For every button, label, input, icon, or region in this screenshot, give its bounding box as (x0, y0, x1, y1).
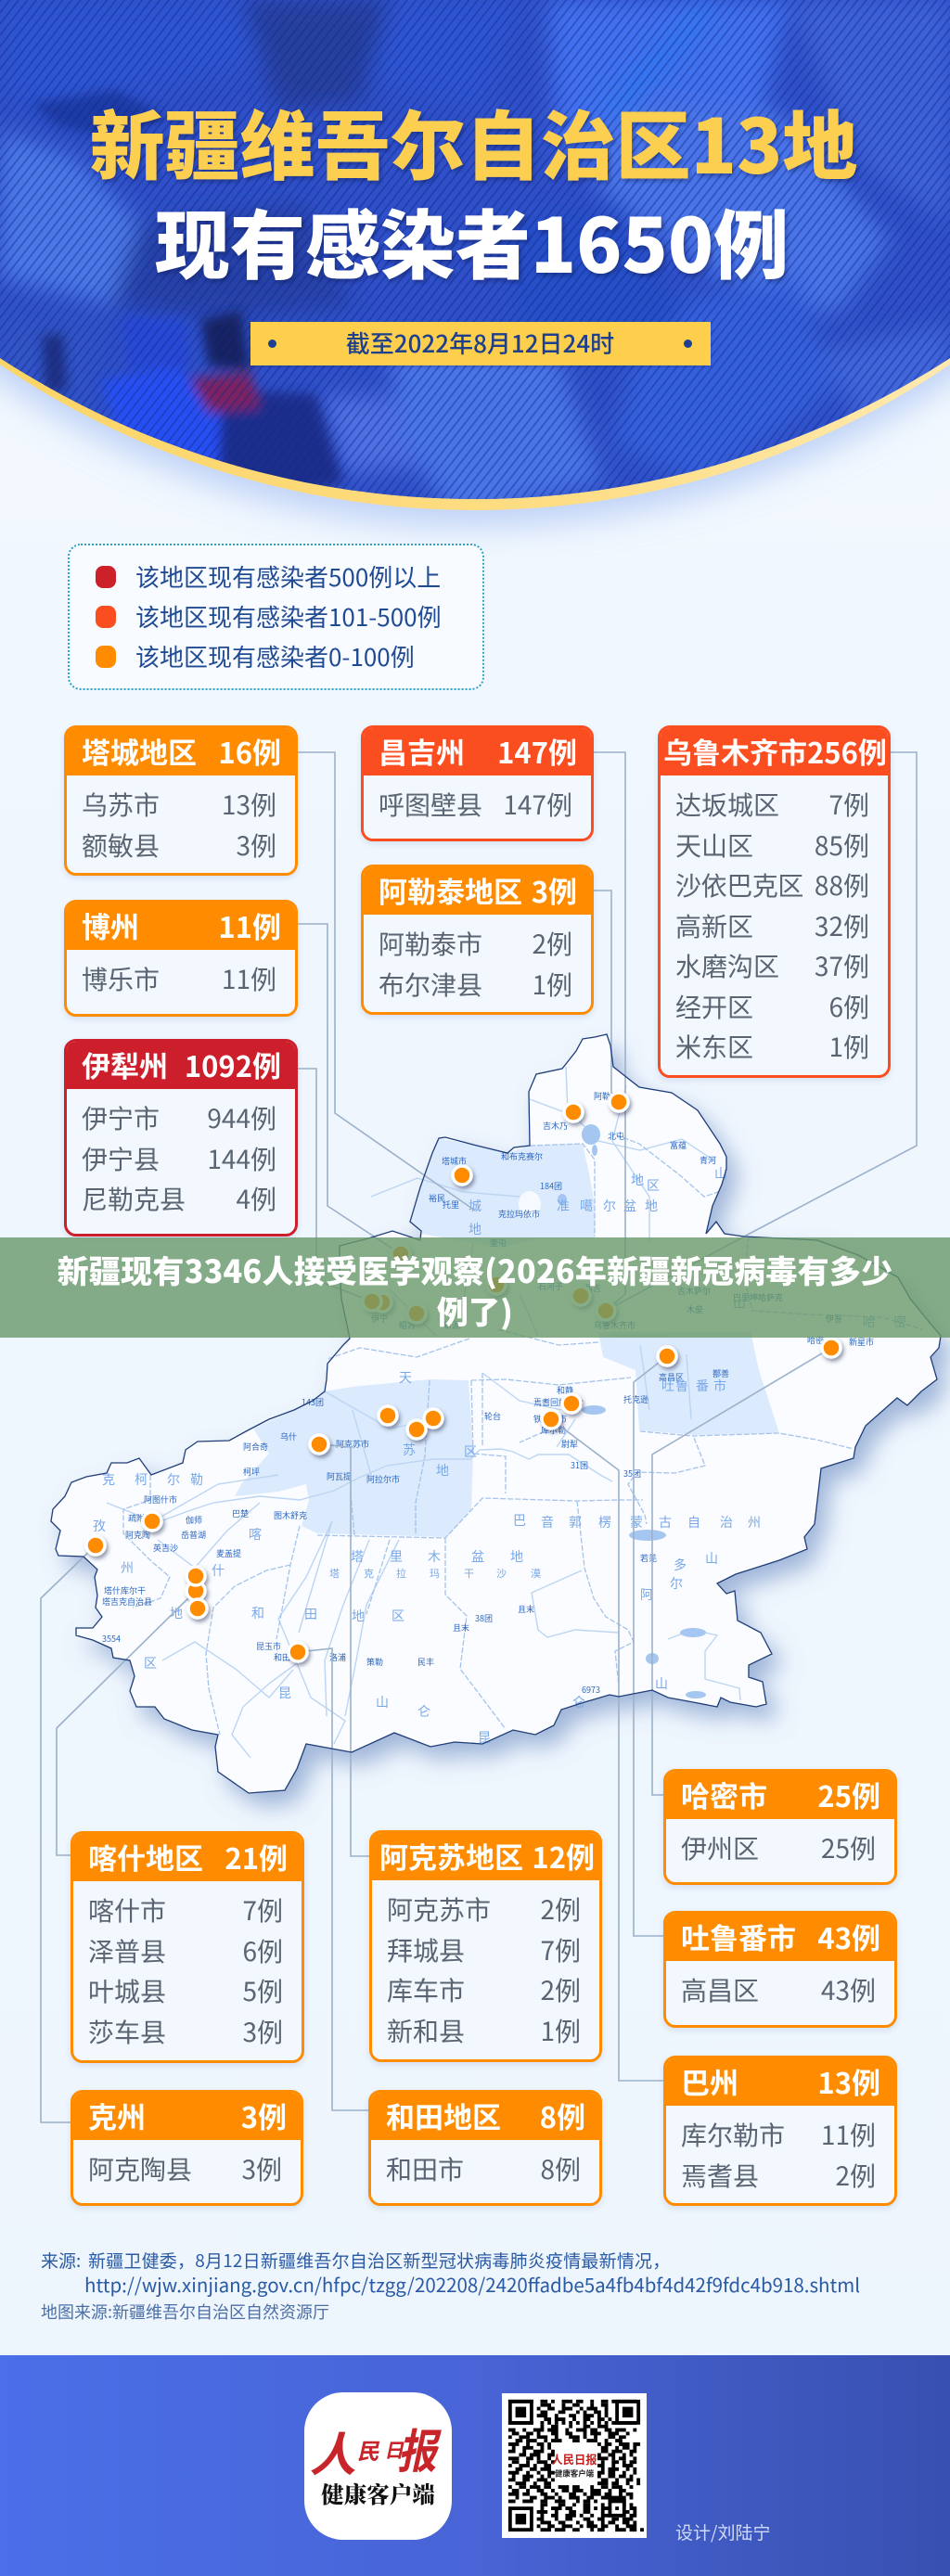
map region names: 地 (631, 1171, 644, 1189)
map region names: 郭 (569, 1513, 582, 1532)
map region names: 盆 (471, 1547, 484, 1566)
map labels: 143团 (302, 1396, 324, 1408)
lakes (519, 1124, 706, 1698)
card: Bortala: 11例 (218, 904, 281, 946)
map labels: 岳普湖 (181, 1529, 206, 1541)
map labels: 昭苏 (399, 1319, 416, 1331)
legend row: over 500: 该地区现有感染者500例以上 (135, 559, 441, 594)
source text (41, 2248, 860, 2324)
card: Ili: 伊宁县 (82, 1139, 160, 1176)
card: Kashgar: 7例 (242, 1891, 283, 1929)
card: Urumqi: 达坂城区 (675, 786, 779, 823)
card: Kashgar: 泽普县 (88, 1931, 166, 1968)
card: Aksu: 阿克苏市 (387, 1890, 491, 1928)
map labels: 克拉玛依市 (498, 1208, 540, 1220)
card: Urumqi: 7例 (828, 786, 869, 823)
map labels: 若羌 (640, 1552, 657, 1564)
map labels: 吉木萨尔 (677, 1285, 711, 1297)
map labels: 184团 (540, 1180, 562, 1192)
logo: People's Daily Health app: 人 (306, 2418, 369, 2485)
map labels: 伊吾 (826, 1313, 842, 1325)
card: Tacheng (64, 725, 298, 876)
card: Bayingolin: 焉耆县 (681, 2156, 759, 2193)
card: Turpan: 43例 (821, 1971, 876, 2008)
map labels: 且末 (518, 1603, 534, 1615)
card: Urumqi: 高新区 (675, 907, 753, 944)
map region names: 柯 (135, 1470, 148, 1489)
map labels: 哈密 (807, 1334, 824, 1346)
card: Hotan (368, 2090, 602, 2206)
map region names: 哈 (863, 1313, 876, 1331)
map region names: 山 (705, 1549, 718, 1568)
map labels: 木垒 (687, 1303, 703, 1315)
card: Changji: 昌吉州 (379, 730, 465, 772)
card: Hotan: 8例 (540, 2095, 585, 2136)
card: Altay: 3例 (532, 869, 577, 911)
map region names: 仑 (572, 1693, 585, 1711)
map region names: 什 (212, 1561, 225, 1580)
map labels: 31团 (571, 1459, 588, 1471)
map labels: 鄯善 (712, 1367, 729, 1379)
card: Kizilsu: 阿克陶县 (88, 2150, 192, 2187)
card: Hotan: 和田市 (386, 2150, 464, 2187)
map region names: 准 (557, 1197, 570, 1215)
map labels: 且末 (453, 1621, 469, 1634)
map labels: 尉犁 (561, 1438, 578, 1450)
logo: People's Daily Health app: 报 (394, 2415, 448, 2482)
map region names: 蒙 (630, 1513, 643, 1532)
map labels: 阿克苏市 (336, 1438, 369, 1450)
map labels: 阿勒泰 (594, 1090, 619, 1102)
map labels: 裕民 (429, 1192, 445, 1204)
card: Changji: 147例 (503, 786, 572, 823)
map labels: 阿瓦提 (327, 1470, 352, 1482)
card: Kizilsu: 3例 (241, 2095, 287, 2136)
card: Urumqi: 6例 (828, 987, 869, 1024)
map region names: 巴 (513, 1511, 526, 1530)
card: Urumqi: 经开区 (675, 987, 753, 1024)
map region names: 田 (304, 1605, 317, 1623)
card: Changji: 呼图壁县 (379, 786, 482, 823)
footer band (0, 2355, 950, 2576)
map region names: 勒 (190, 1470, 203, 1489)
card: Kashgar (71, 1831, 304, 2063)
map labels: 乌什 (280, 1430, 297, 1442)
map labels: 和布克赛尔 (501, 1150, 543, 1162)
map labels: 奎屯 (490, 1237, 507, 1249)
card: Aksu: 拜城县 (387, 1931, 465, 1968)
QR code: 健康客户端 (555, 2468, 595, 2480)
card: Turpan (663, 1911, 897, 2028)
map labels: 35团 (623, 1467, 641, 1480)
map region names: 州 (748, 1513, 761, 1532)
map labels: 伊宁 (371, 1313, 388, 1325)
card: Bayingolin: 13例 (817, 2060, 880, 2102)
card: Aksu: 2例 (540, 1971, 581, 2008)
map region names: 多 (674, 1556, 687, 1574)
card: Hami (663, 1769, 897, 1885)
card: Aksu: 1例 (540, 2011, 581, 2048)
map region names: 山 (714, 1164, 727, 1183)
header hero: blurred photo with diagonal stripes and yellow arc (0, 0, 950, 543)
map region names: 地 (170, 1604, 183, 1622)
map region names: 治 (720, 1513, 733, 1532)
map labels: 阿克陶 (125, 1529, 150, 1541)
card: Bortala: 博乐市 (82, 960, 160, 997)
card: Changji: 147例 (497, 730, 577, 772)
map region names: 区 (392, 1607, 404, 1625)
map region names: 古 (659, 1513, 672, 1532)
card: Bortala: 11例 (222, 960, 276, 997)
card: Turpan: 43例 (817, 1916, 880, 1957)
card: Tacheng: 13例 (222, 786, 276, 823)
highlighted prefecture: Aksu (235, 1379, 473, 1537)
date banner (250, 322, 711, 365)
map region names: 楞 (598, 1513, 611, 1532)
logo: People's Daily Health app: 民 (355, 2433, 385, 2466)
map labels: 托克逊 (623, 1393, 648, 1405)
map labels: 青河 (700, 1154, 716, 1166)
map region names: 地 (352, 1607, 365, 1625)
map region names: 噶 (580, 1197, 593, 1215)
card: Kashgar: 莎车县 (88, 2013, 166, 2050)
card: Urumqi: 水磨沟区 (675, 947, 779, 984)
designer credit: 设计/刘陆宁 (675, 2519, 770, 2544)
map outline (51, 1034, 941, 1793)
map region names: 地 (469, 1220, 481, 1238)
map labels: 北屯 (608, 1130, 624, 1142)
source text: http://wjw.xinjiang.gov.cn/hfpc/tzgg/202208/2420ffadbe5a4fb4bf4d42f9fdc4b918.shtml (84, 2270, 860, 2298)
card: Altay: 阿勒泰市 (379, 925, 482, 962)
card: Bayingolin: 2例 (835, 2156, 876, 2193)
map labels: 乌鲁木齐市 (594, 1319, 635, 1331)
map region names: 克 (102, 1470, 115, 1489)
map region names: 区 (464, 1442, 477, 1461)
map labels: 英吉沙 (153, 1542, 178, 1554)
card: Ili (64, 1039, 298, 1237)
card: Bortala (64, 900, 298, 1017)
pins: locations with cases (86, 1093, 841, 1661)
map labels: 巴楚 (232, 1507, 249, 1519)
map region names: 山 (376, 1693, 389, 1711)
map region names: 苏 (403, 1441, 416, 1459)
QR code (502, 2393, 647, 2538)
card: Kashgar: 3例 (242, 2013, 283, 2050)
map region names: 沙 (496, 1566, 507, 1581)
card: Tacheng: 额敏县 (82, 826, 160, 863)
map labels: 轮台 (484, 1410, 501, 1422)
map land shape (51, 1034, 941, 1793)
map region names: 尔 (603, 1197, 616, 1215)
map labels: 阿图什市 (144, 1493, 177, 1506)
map region names: 仑 (417, 1702, 430, 1721)
legend row: 101-500: 该地区现有感染者101-500例 (135, 599, 442, 634)
map labels: 伽师 (186, 1514, 202, 1526)
map region names: 天 (399, 1368, 412, 1387)
card: Hami: 25例 (817, 1774, 880, 1815)
map region names: 玛 (430, 1566, 440, 1581)
card: Kashgar: 喀什市 (88, 1891, 166, 1929)
map labels: 新源 (443, 1319, 460, 1331)
card: Ili: 尼勒克县 (82, 1180, 186, 1217)
card: Ili: 伊犁州 (82, 1044, 168, 1085)
title line 2: 现有感染者1650例 (155, 186, 789, 295)
card: Bortala: 博州 (82, 904, 139, 946)
map labels: 38团 (475, 1612, 493, 1624)
card: Bayingolin: 库尔勒市 (681, 2116, 785, 2153)
card: Bayingolin: 巴州 (681, 2060, 738, 2102)
card: Ili: 4例 (236, 1180, 276, 1217)
legend panel (68, 544, 484, 690)
map region names: 尔 (670, 1574, 683, 1593)
map region names: 城 (469, 1197, 481, 1215)
card: Aksu: 阿克苏地区 (379, 1835, 523, 1877)
card: Tacheng: 塔城地区 (82, 730, 197, 772)
card: Hami: 伊州区 (681, 1829, 759, 1866)
card: Hotan: 和田地区 (386, 2095, 501, 2136)
connector lines (41, 752, 917, 2122)
map labels: 新星市 (849, 1336, 874, 1348)
card: Aksu: 2例 (540, 1890, 581, 1928)
card: Urumqi: 32例 (815, 907, 869, 944)
map labels: 疏附 (128, 1512, 145, 1524)
map labels: 策勒 (366, 1656, 383, 1668)
map labels (102, 1090, 874, 1696)
card: Kashgar: 喀什地区 (88, 1836, 203, 1878)
map labels: 6973 (582, 1684, 600, 1696)
card: Kizilsu: 克州 (88, 2095, 146, 2136)
map region names: 阿 (640, 1585, 653, 1604)
source text: 来源: (41, 2248, 81, 2273)
administrative boundaries (123, 1134, 922, 1735)
card: Hotan: 8例 (540, 2150, 581, 2187)
map region names: 干 (464, 1566, 474, 1581)
card: Altay (361, 865, 594, 1015)
map labels: 吉木乃 (543, 1120, 568, 1132)
card: Altay: 1例 (532, 965, 572, 1002)
card: Hami: 25例 (821, 1829, 876, 1866)
highlighted prefecture: Tacheng (410, 1138, 595, 1248)
card: Ili: 144例 (207, 1139, 276, 1176)
map labels: 麦盖提 (216, 1547, 241, 1559)
card: Urumqi: 256例 (807, 730, 887, 772)
highlighted prefecture: Turpan (598, 1332, 779, 1435)
overlay caption band: 新疆现有3346人接受医学观察(2026年新疆新冠病毒有多少 (58, 1247, 892, 1292)
card: Urumqi: 37例 (815, 947, 869, 984)
source text: 新疆卫健委，8月12日新疆维吾尔自治区新型冠状病毒肺炎疫情最新情况， (88, 2248, 670, 2273)
map region names: 地 (645, 1197, 658, 1215)
map labels: 巴里坤哈萨克 (733, 1291, 783, 1303)
card: Bayingolin (663, 2056, 897, 2206)
map labels: 塔城市 (442, 1155, 467, 1167)
card: Aksu: 7例 (540, 1931, 581, 1968)
card: Urumqi: 85例 (815, 826, 869, 863)
card: Urumqi: 88例 (815, 866, 869, 904)
map labels: 昌吉 (584, 1282, 601, 1294)
map region names: 自 (687, 1513, 700, 1532)
map labels: 塔什库尔干 (104, 1584, 146, 1596)
card: Turpan: 高昌区 (681, 1971, 759, 2008)
map labels: 3554 (102, 1633, 121, 1645)
map labels: 库尔勒 (541, 1424, 566, 1436)
card: Urumqi: 乌鲁木齐市 (663, 730, 807, 772)
overlay caption band (0, 1237, 950, 1338)
map region names: 孜 (93, 1517, 106, 1535)
card: Altay: 布尔津县 (379, 965, 482, 1002)
map labels: 塔吉克自治县 (102, 1596, 152, 1608)
card: Bayingolin: 11例 (821, 2116, 876, 2153)
map region names: 塔 (329, 1566, 340, 1581)
card: Ili: 944例 (207, 1099, 276, 1136)
map region names: 山 (655, 1674, 668, 1693)
logo: People's Daily Health app: 健康客户端 (321, 2478, 435, 2510)
map region names: 地 (510, 1547, 523, 1566)
card: Kizilsu: 3例 (241, 2150, 282, 2187)
map labels: 柯坪 (243, 1466, 260, 1478)
logo: People's Daily Health app (304, 2392, 452, 2540)
map labels: 和静 (557, 1384, 573, 1396)
map region names: 地 (436, 1461, 449, 1480)
map region names: 番 (696, 1377, 709, 1395)
card: Ili: 1092例 (185, 1044, 281, 1085)
map labels: 石河子 (538, 1280, 563, 1292)
map labels: 阿拉尔市 (366, 1473, 400, 1485)
logo: People's Daily Health app: 日 (383, 2436, 408, 2464)
legend row: 0-100: 该地区现有感染者0-100例 (135, 639, 415, 673)
map region names: 市 (713, 1377, 726, 1395)
map region names: 音 (541, 1513, 554, 1532)
map region names: 区 (647, 1176, 660, 1195)
map labels: 昆玉市 (256, 1640, 281, 1652)
map region names: 木 (428, 1547, 441, 1566)
date banner: 截至2022年8月12日24时 (346, 326, 614, 360)
card: Altay: 阿勒泰地区 (379, 869, 522, 911)
map region names: 塔 (351, 1547, 364, 1566)
overlay caption band: 例了) (437, 1288, 513, 1333)
map region names: 漠 (531, 1566, 541, 1581)
card: Urumqi: 沙依巴克区 (675, 866, 803, 904)
map labels: 托里 (443, 1198, 459, 1211)
card: Aksu: 新和县 (387, 2011, 465, 2048)
map region names: 喀 (249, 1525, 262, 1544)
card: Urumqi: 天山区 (675, 826, 753, 863)
card: Turpan: 吐鲁番市 (681, 1916, 796, 1957)
card: Hami: 哈密市 (681, 1774, 767, 1815)
map region names: 区 (144, 1654, 157, 1672)
map region names: 拉 (396, 1566, 406, 1581)
source text: 地图来源:新疆维吾尔自治区自然资源厅 (41, 2300, 329, 2324)
card: Kashgar: 21例 (225, 1836, 288, 1878)
card: Tacheng: 16例 (218, 730, 281, 772)
map region names: 里 (390, 1547, 403, 1566)
card: Tacheng: 乌苏市 (82, 786, 160, 823)
card: Altay: 2例 (532, 925, 572, 962)
map labels: 和田 (274, 1651, 290, 1663)
map region names: 吐 (661, 1377, 674, 1395)
map labels: 铁门关市 (533, 1413, 567, 1425)
map region names: 和 (251, 1604, 264, 1622)
map region names (93, 1164, 906, 1747)
map region names: 州 (121, 1558, 134, 1577)
QR code: 人民日报 (551, 2451, 597, 2467)
map labels: 焉耆回族自治 (533, 1396, 584, 1408)
map region names: 尔 (167, 1470, 180, 1489)
card: Aksu: 12例 (532, 1835, 595, 1877)
map region names: 密 (893, 1313, 906, 1331)
card: Ili: 伊宁市 (82, 1099, 160, 1136)
map region names: 山 (733, 1294, 746, 1313)
card: Kizilsu (71, 2090, 303, 2206)
map labels: 民丰 (417, 1656, 434, 1668)
map region names: 昆 (478, 1728, 491, 1747)
card: Kashgar: 6例 (242, 1931, 283, 1968)
map region names: 昆 (278, 1684, 291, 1702)
map region names: 鲁 (675, 1377, 688, 1395)
card: Urumqi: 1例 (828, 1028, 869, 1065)
map labels: 富蕴 (670, 1139, 687, 1151)
card: Changji (361, 725, 594, 841)
map region names: 盆 (623, 1197, 636, 1215)
card: Aksu (369, 1830, 602, 2062)
title line 1: 新疆维吾尔自治区13地 (90, 87, 857, 196)
card: Tacheng: 3例 (236, 826, 276, 863)
card: Kashgar: 叶城县 (88, 1972, 166, 2009)
map region names: 克 (364, 1566, 374, 1581)
map labels: 高昌区 (659, 1371, 684, 1383)
map labels: 洛浦 (329, 1651, 346, 1663)
card: Urumqi (658, 725, 891, 1078)
card: Urumqi: 米东区 (675, 1028, 753, 1065)
card: Kashgar: 5例 (242, 1972, 283, 2009)
card: Aksu: 库车市 (387, 1971, 465, 2008)
map labels: 阿合奇 (243, 1441, 268, 1453)
map labels: 图木舒克 (274, 1509, 307, 1521)
rivers (107, 1067, 740, 1758)
